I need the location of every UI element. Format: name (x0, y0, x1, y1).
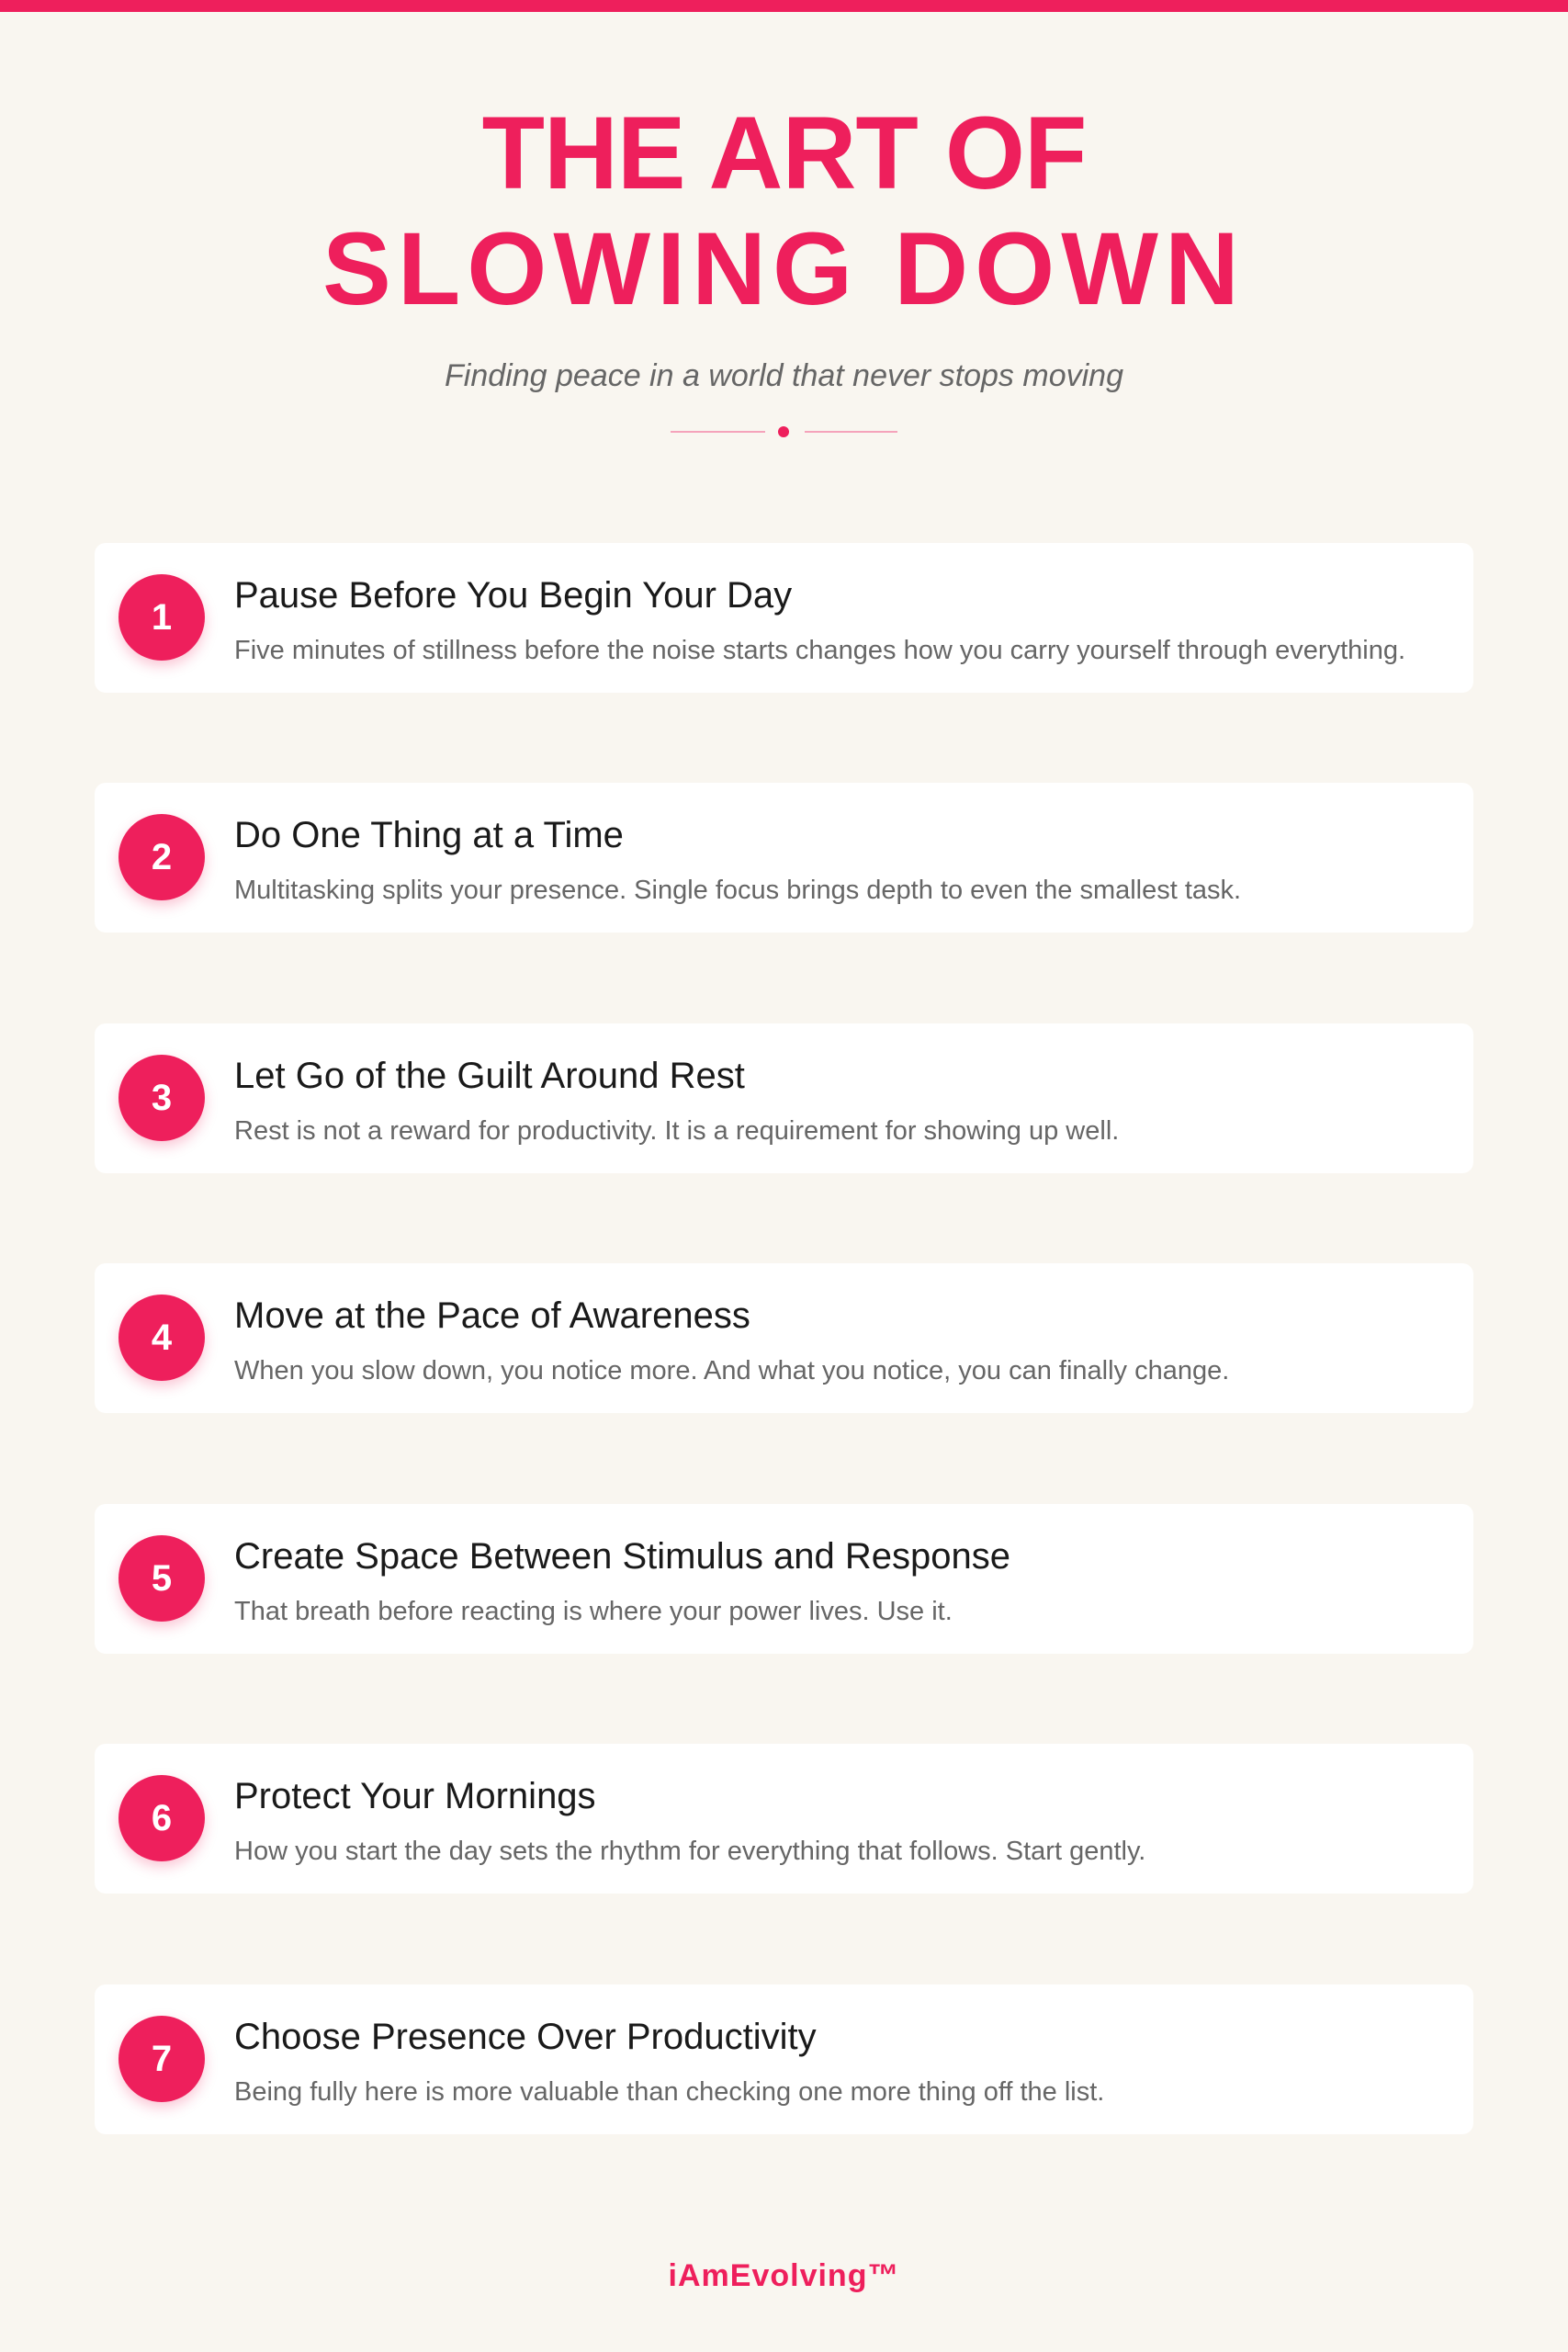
card 3: Let Go of the Guilt Around Rest (234, 1056, 745, 1096)
title: THE ART OF (482, 96, 1086, 210)
card 7: Being fully here is more valuable than checking one more thing off the list. (234, 2077, 1104, 2107)
card 2 (95, 783, 1473, 933)
card 1: 1 (152, 597, 172, 638)
card 2: Do One Thing at a Time (234, 815, 624, 855)
card 7: Choose Presence Over Productivity (234, 2017, 817, 2057)
title (322, 96, 1246, 326)
card 1: Pause Before You Begin Your Day (234, 575, 792, 616)
card 6: Protect Your Mornings (234, 1776, 596, 1816)
card 1: Five minutes of stillness before the noise starts changes how you carry yourself through everything. (234, 636, 1405, 665)
card 5: Create Space Between Stimulus and Response (234, 1536, 1010, 1577)
title: SLOWING DOWN (322, 211, 1246, 326)
card 4: When you slow down, you notice more. And what you notice, you can finally change. (234, 1356, 1229, 1385)
card 3: Rest is not a reward for productivity. It is a requirement for showing up well. (234, 1116, 1119, 1146)
card 4: 4 (152, 1317, 172, 1358)
card 3 (95, 1023, 1473, 1173)
card 6: How you start the day sets the rhythm for everything that follows. Start gently. (234, 1837, 1145, 1866)
card 6: 6 (152, 1798, 172, 1838)
card 3: 3 (152, 1078, 172, 1118)
card 4: Move at the Pace of Awareness (234, 1295, 750, 1336)
card 4 (95, 1263, 1473, 1413)
card 5: That breath before reacting is where your power lives. Use it. (234, 1597, 953, 1626)
card 2: 2 (152, 837, 172, 877)
subtitle: Finding peace in a world that never stops moving (445, 358, 1123, 393)
card 1 (95, 543, 1473, 693)
footer brand: iAmEvolving™ (669, 2258, 899, 2293)
card 7: 7 (152, 2039, 172, 2079)
card 7 (95, 1984, 1473, 2134)
divider ornament (671, 426, 897, 437)
card 5 (95, 1504, 1473, 1654)
card 6 (95, 1744, 1473, 1894)
card 2: Multitasking splits your presence. Single focus brings depth to even the smallest task. (234, 876, 1241, 905)
card 5: 5 (152, 1558, 172, 1599)
